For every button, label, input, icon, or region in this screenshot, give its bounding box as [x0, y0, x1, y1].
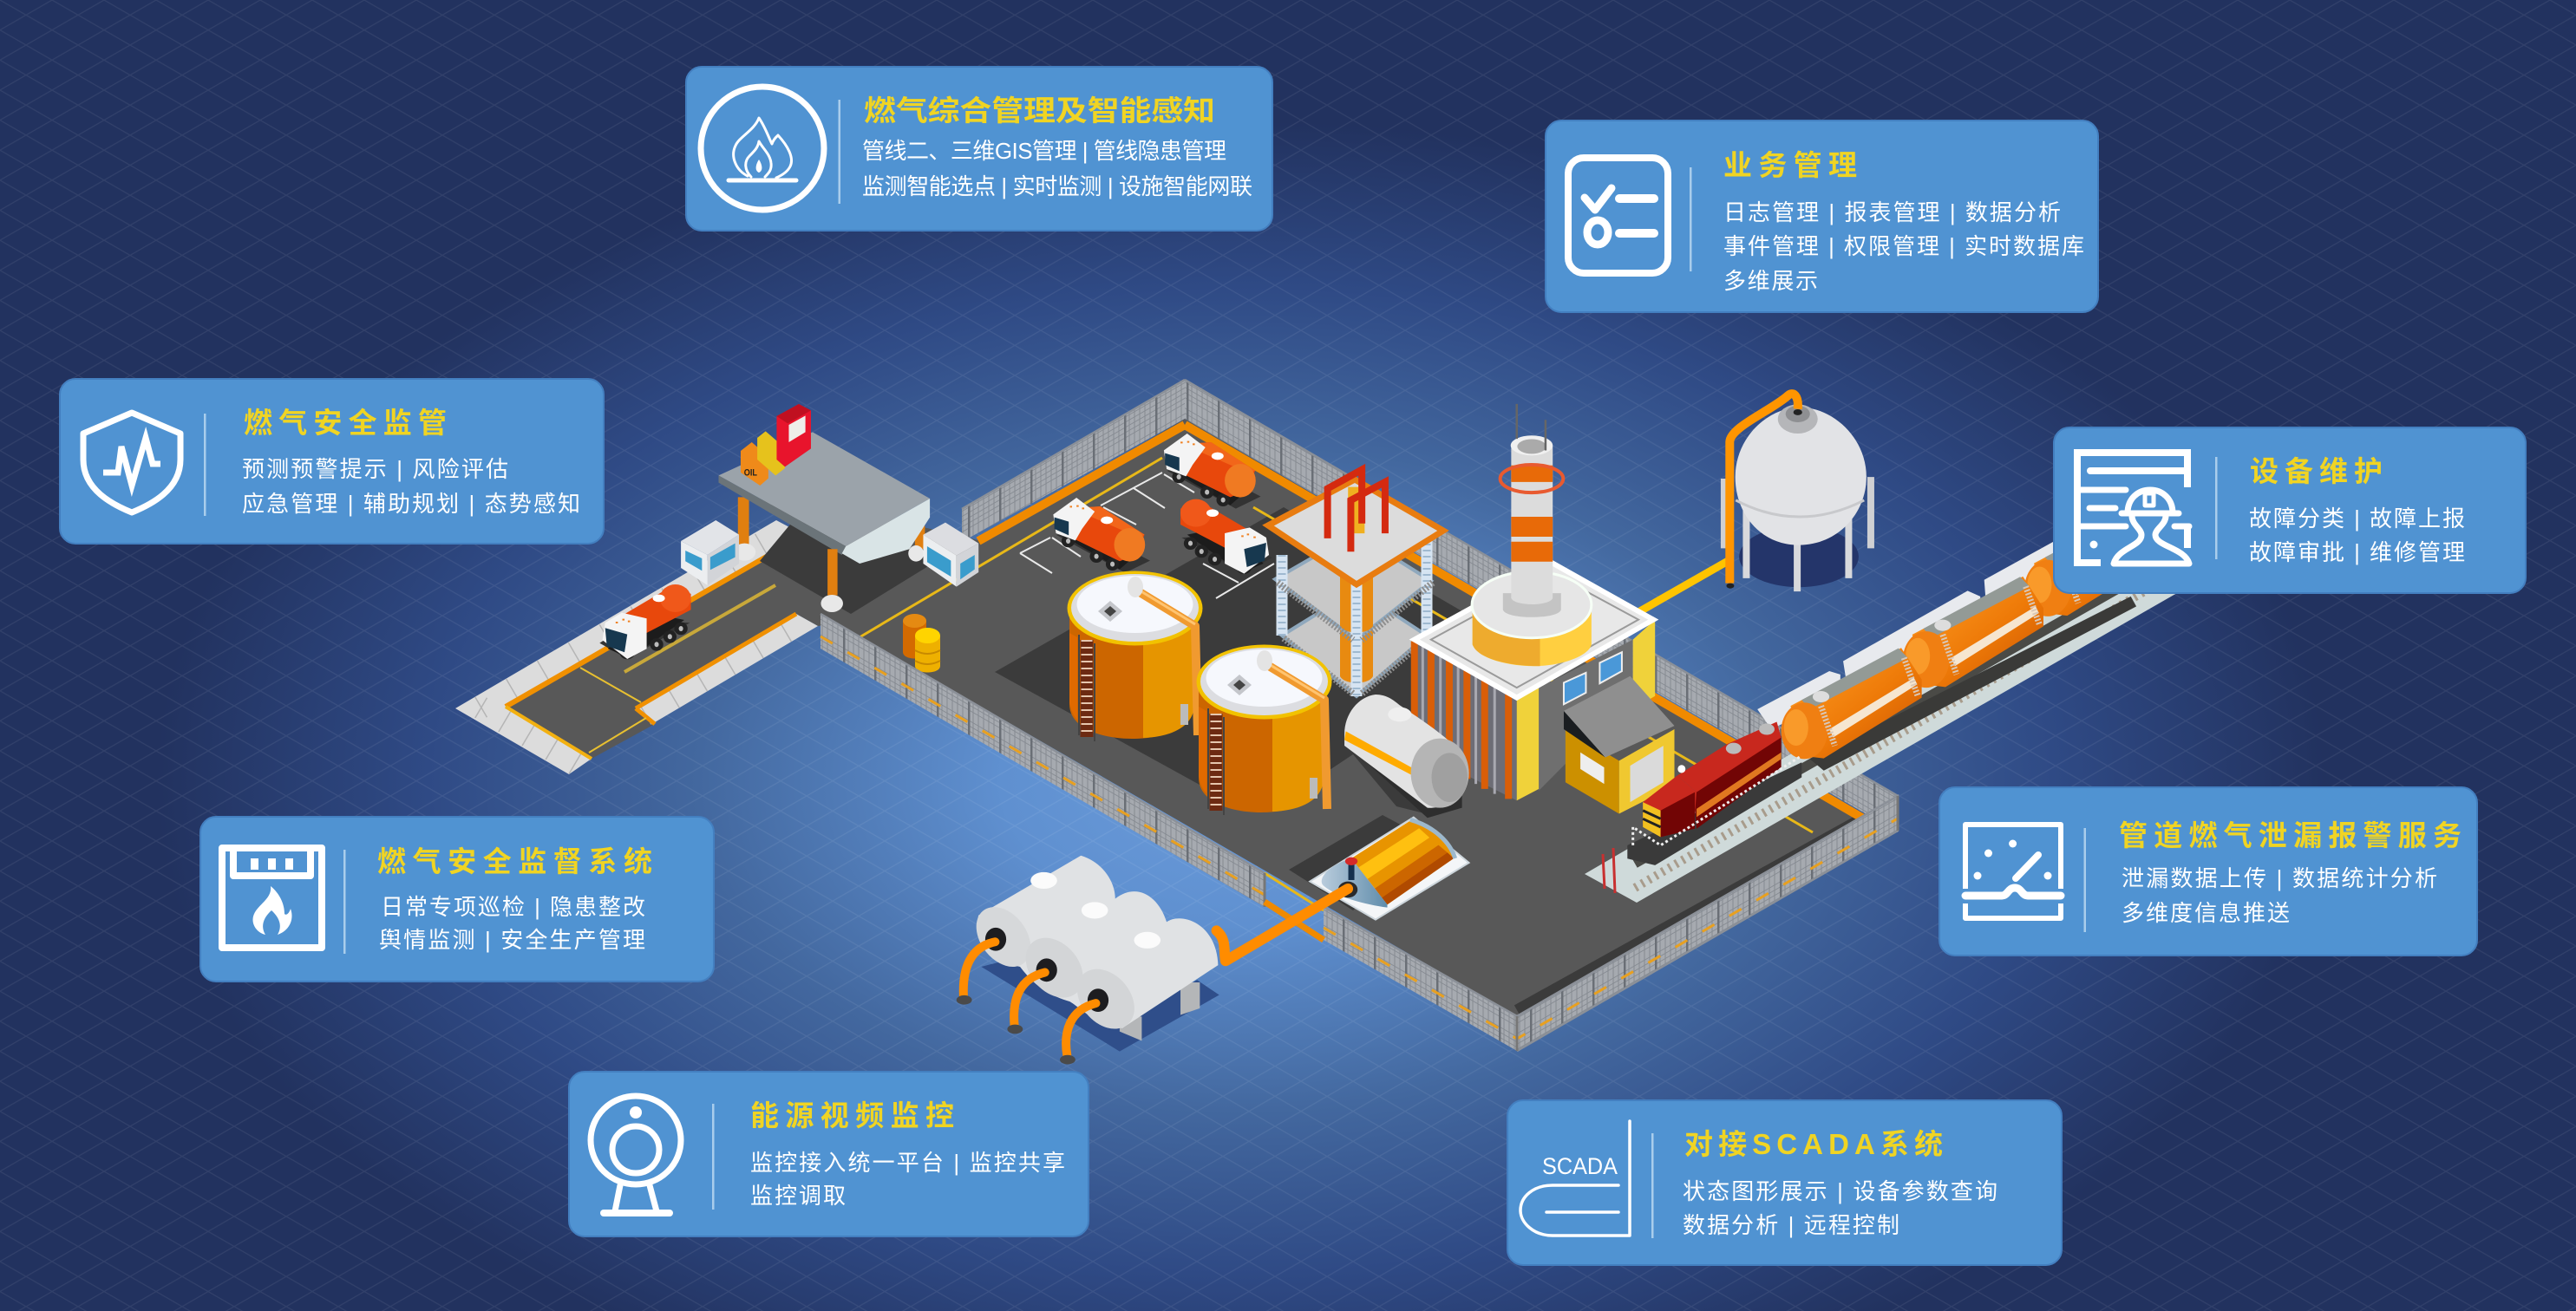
yellow connector pipe to sphere [1638, 560, 1729, 612]
panel: 对接SCADA系统 [1507, 1100, 2062, 1265]
panel: 燃气安全监督系统: 日常专项巡检 | 隐患整改 [381, 894, 645, 920]
panel: 设备维护: 故障审批 | 维修管理 [2249, 539, 2465, 565]
panel: 燃气安全监管: 应急管理 | 辅助规划 | 态势感知 [242, 491, 580, 517]
panel: 业务管理: 日志管理 | 报表管理 | 数据分析 [1723, 199, 2061, 225]
front fences [821, 614, 1898, 1051]
icon: camera [591, 1096, 681, 1213]
scaffold process tower [1268, 479, 1443, 696]
icon: SCADA: SCADA [1542, 1153, 1618, 1179]
panel: 燃气安全监督系统: 燃气安全监督系统 [377, 845, 652, 877]
panel: 燃气综合管理及智能感知: 监测智能选点 | 实时监测 | 设施智能网联 [862, 173, 1252, 199]
panel: 管道燃气泄漏报警服务: 泄漏数据上传 | 数据统计分析 [2122, 865, 2437, 891]
platform blocks behind train [1757, 542, 2053, 729]
panel: 对接SCADA系统: 对接SCADA系统 [1684, 1128, 1943, 1160]
panel: 燃气安全监督系统 [200, 817, 714, 982]
panel: 设备维护: 设备维护 [2250, 455, 2383, 487]
panel: 业务管理: 事件管理 | 权限管理 | 实时数据库 [1723, 233, 2084, 259]
panel: 燃气安全监管 [60, 379, 604, 544]
oil drums [903, 614, 940, 673]
panel: 燃气安全监管: 燃气安全监管 [244, 407, 447, 439]
panel: 燃气安全监管: 预测预警提示 | 风险评估 [242, 456, 508, 482]
panel: 设备维护: 故障分类 | 故障上报 [2249, 505, 2465, 532]
stack building [1415, 564, 1675, 814]
panel: 业务管理 [1546, 121, 2098, 312]
icon: flame in circle [701, 87, 824, 210]
rail bed [1585, 560, 2177, 903]
triple storage tanks [957, 856, 1219, 1064]
panel: 能源视频监控: 能源视频监控 [750, 1099, 954, 1132]
panel: 燃气安全监督系统: 舆情监测 | 安全生产管理 [379, 927, 645, 953]
plant ground slab [760, 419, 1867, 1016]
orange transfer pipe [1217, 889, 1348, 961]
panel: 燃气综合管理及智能感知 [686, 67, 1272, 231]
chimney stack [1472, 404, 1592, 666]
panel: 管道燃气泄漏报警服务 [1939, 787, 2477, 956]
panel: 能源视频监控 [569, 1072, 1089, 1236]
panel: 对接SCADA系统: 数据分析 | 远程控制 [1683, 1212, 1899, 1238]
fence: back sides [962, 380, 1898, 832]
icon: worker with document [2077, 453, 2189, 564]
panel: 燃气综合管理及智能感知: 燃气综合管理及智能感知 [864, 95, 1215, 127]
panel: 管道燃气泄漏报警服务: 多维度信息推送 [2122, 900, 2290, 926]
entry road with curbs [455, 486, 1041, 774]
icon: SCADA [1520, 1121, 1630, 1236]
fuel dispenser and cans on canopy [741, 404, 811, 486]
icon: gauge [1965, 825, 2061, 918]
panel: 业务管理: 多维展示 [1723, 268, 1818, 294]
gate canopy and booths [681, 432, 978, 612]
tank wagons [1782, 505, 2165, 771]
red frame on tower [1328, 470, 1385, 551]
tank 2 [1197, 645, 1332, 815]
white horizontal tank [1344, 695, 1469, 818]
tanker trucks in parking [1053, 434, 1272, 574]
panel: 对接SCADA系统: 状态图形展示 | 设备参数查询 [1683, 1178, 1997, 1204]
entry truck [599, 584, 691, 659]
icon: stove with flame [222, 848, 322, 948]
panel: 设备维护 [2054, 427, 2526, 593]
panel: 能源视频监控: 监控接入统一平台 | 监控共享 [750, 1150, 1065, 1176]
panel: 业务管理: 业务管理 [1723, 149, 1857, 181]
panel: 燃气综合管理及智能感知: 管线二、三维GIS管理 | 管线隐患管理 [862, 138, 1226, 164]
gold tank on pad [1310, 818, 1469, 920]
icon: shield with pulse [83, 413, 180, 512]
fuel dispenser and cans on canopy: OIL [744, 468, 757, 479]
panel: 管道燃气泄漏报警服务: 管道燃气泄漏报警服务 [2119, 819, 2462, 851]
locomotive [1627, 722, 1801, 865]
tank 1 [1067, 571, 1202, 741]
panel: 能源视频监控: 监控调取 [750, 1183, 846, 1209]
icon: checklist [1568, 158, 1668, 273]
gas sphere tank [1724, 394, 1871, 591]
